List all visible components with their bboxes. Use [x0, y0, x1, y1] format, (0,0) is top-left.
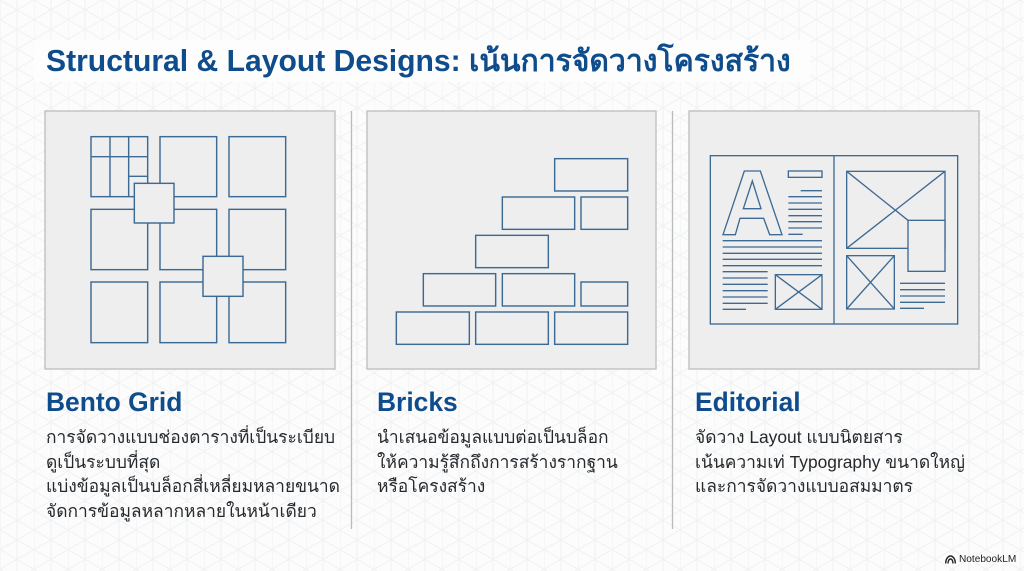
text: editorial description: และการจัดวางแบบอสมมาตร	[695, 476, 913, 496]
brand: NotebookLM logo: NotebookLM	[959, 554, 1016, 565]
panel: bricks illustration	[366, 110, 657, 370]
text: bento grid description: การจัดวางแบบช่องตารางที่เป็นระเบียบ	[46, 427, 335, 447]
text: bento grid description: ดูเป็นระบบที่สุด	[46, 452, 160, 472]
heading: editorial: Editorial	[695, 387, 801, 417]
title: Structural & Layout Designs: เน้นการจัดวางโครงสร้าง	[46, 45, 791, 78]
text: bento grid description	[46, 425, 340, 522]
panel: bento grid illustration	[44, 110, 336, 370]
text: bricks description: หรือโครงสร้าง	[377, 476, 485, 496]
panel: editorial illustration	[688, 110, 980, 370]
text: editorial description	[695, 427, 965, 496]
text: bricks description: ให้ความรู้สึกถึงการสร้างรากฐาน	[377, 452, 618, 472]
heading: bento grid: Bento Grid	[46, 387, 182, 417]
text: bricks description	[377, 426, 618, 496]
heading: bricks: Bricks	[377, 387, 458, 417]
text: bento grid description: จัดการข้อมูลหลากหลายในหน้าเดียว	[46, 500, 317, 520]
text: bento grid description: แบ่งข้อมูลเป็นบล็อกสี่เหลี่ยมหลายขนาด	[46, 476, 340, 496]
text: editorial description: เน้นความเท่ Typography ขนาดใหญ่	[695, 452, 965, 472]
text: bricks description: นำเสนอข้อมูลแบบต่อเป็นบล็อก	[377, 427, 609, 447]
text: editorial description: จัดวาง Layout แบบนิตยสาร	[695, 427, 903, 447]
